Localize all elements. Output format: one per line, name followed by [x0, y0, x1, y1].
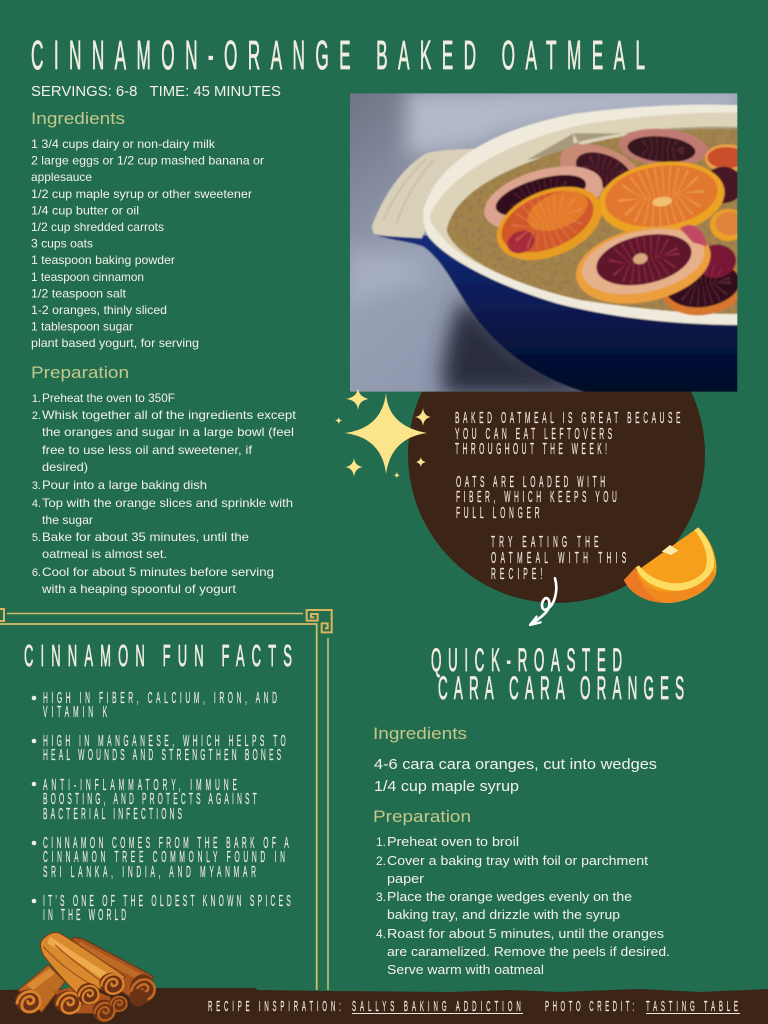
slice: orange small: [496, 185, 602, 261]
oranges preparation steps: 2.: [376, 854, 386, 868]
title: CINNAMON-ORANGE BAKED OATMEAL: [31, 32, 645, 78]
circle text: oatmeal benefits: [455, 409, 681, 583]
oranges preparation steps: Roast for about 5 minutes, until the oranges: [387, 926, 665, 941]
preparation steps: desired): [42, 460, 88, 474]
footer credits: PHOTO CREDIT:: [545, 999, 634, 1015]
circle text: oatmeal benefits: OATS ARE LOADED WITH: [456, 473, 605, 491]
footer credits: RECIPE INSPIRATION:: [208, 999, 341, 1015]
preparation steps: 3.: [32, 480, 41, 492]
brown circle: [408, 306, 705, 603]
circle text: oatmeal benefits: THROUGHOUT THE WEEK!: [455, 440, 607, 458]
icon: orange wedge: [624, 527, 716, 603]
frame: gold key border: [0, 609, 332, 990]
preparation steps: Preheat the oven to 350F: [42, 391, 175, 405]
ingredients list: 1/4 cup butter or oil: [31, 204, 139, 218]
footer credits: [208, 999, 738, 1015]
heading: quick-roasted cara cara oranges: QUICK-ROASTED: [431, 644, 622, 679]
circle text: oatmeal benefits: FULL LONGER: [456, 504, 540, 522]
list: cinnamon facts: HIGH IN FIBER, CALCIUM, IRON, AND: [43, 689, 277, 707]
list: cinnamon facts: IN THE WORLD: [43, 906, 126, 924]
list: cinnamon facts: HEAL WOUNDS AND STRENGTHEN BONES: [43, 746, 281, 764]
preparation steps: 1.: [32, 393, 41, 405]
oranges ingredients list: 1/4 cup maple syrup: [374, 778, 519, 795]
preparation heading: Preparation: [31, 363, 129, 382]
circle text: oatmeal benefits: OATMEAL WITH THIS: [491, 549, 626, 567]
stick: back right: [72, 938, 155, 1004]
oranges preparation steps: 1.: [376, 835, 386, 849]
preparation steps: Cool for about 5 minutes before serving: [42, 565, 274, 579]
preparation steps: with a heaping spoonful of yogurt: [41, 582, 237, 596]
oranges preparation steps: are caramelized. Remove the peels if desired.: [387, 944, 670, 959]
slice: blood orange upper: [559, 144, 637, 197]
preparation steps: 6.: [32, 567, 41, 579]
ingredients list: 1 tablespoon sugar: [31, 320, 133, 334]
servings and time: SERVINGS: 6-8 TIME: 45 MINUTES: [31, 84, 281, 100]
list: cinnamon facts: CINNAMON TREE COMMONLY FOUND IN: [43, 848, 285, 866]
ingredients list: 1/2 teaspoon salt: [31, 286, 127, 300]
oranges ingredients heading: Ingredients: [373, 724, 467, 743]
circle text: oatmeal benefits: FIBER, WHICH KEEPS YOU: [456, 488, 617, 506]
slice: blood orange left: [483, 166, 604, 228]
list: cinnamon facts: ANTI-INFLAMMATORY, IMMUNE: [43, 776, 237, 794]
oranges preparation heading: Preparation: [373, 807, 471, 826]
stick: top: [40, 933, 125, 1005]
preparation steps: 4.: [32, 498, 41, 510]
ingredients list: 1/2 cup shredded carrots: [31, 220, 164, 234]
preparation steps: Bake for about 35 minutes, until the: [42, 530, 249, 544]
slice: blood orange top right: [618, 128, 708, 164]
preparation steps: Whisk together all of the ingredients except: [42, 408, 297, 422]
slice: orange large: [598, 160, 726, 232]
preparation steps: free to use less oil and sweetener, if: [42, 443, 253, 457]
circle text: oatmeal benefits: BAKED OATMEAL IS GREAT BECAUSE: [455, 409, 681, 427]
preparation steps: [32, 391, 297, 596]
list: cinnamon facts: [32, 689, 291, 924]
circle text: oatmeal benefits: RECIPE!: [491, 565, 542, 583]
oranges ingredients list: 4-6 cara cara oranges, cut into wedges: [374, 756, 657, 773]
preparation steps: Top with the orange slices and sprinkle with: [42, 496, 293, 510]
preparation steps: 5.: [32, 532, 41, 544]
slice: right edge oranges: [704, 144, 738, 242]
stick: left: [15, 965, 65, 1013]
preparation steps: the oranges and sugar in a large bowl (feel: [42, 425, 294, 439]
list: cinnamon facts: SRI LANKA, INDIA, AND MYANMAR: [43, 863, 256, 881]
ingredients list: applesauce: [31, 170, 92, 184]
footer credits: TASTING TABLE: [646, 999, 738, 1015]
circle text: oatmeal benefits: YOU CAN EAT LEFTOVERS: [455, 425, 612, 443]
preparation steps: oatmeal is almost set.: [42, 547, 167, 561]
ingredients list: 1/2 cup maple syrup or other sweetener: [31, 187, 252, 201]
list: cinnamon facts: BOOSTING, AND PROTECTS AGAINST: [43, 790, 257, 808]
oranges preparation steps: Preheat oven to broil: [387, 834, 519, 849]
icon: cinnamon sticks: [15, 933, 155, 1022]
list: cinnamon facts: CINNAMON COMES FROM THE BARK OF A: [43, 834, 289, 852]
heading: cinnamon fun facts: CINNAMON FUN FACTS: [24, 639, 292, 674]
ingredients list: 1 teaspoon cinnamon: [31, 270, 144, 284]
ingredients list: 1 3/4 cups dairy or non-dairy milk: [31, 137, 216, 151]
list: cinnamon facts: IT'S ONE OF THE OLDEST KNOWN SPICES: [43, 892, 291, 910]
ingredients heading: Ingredients: [31, 109, 125, 128]
list: cinnamon facts: HIGH IN MANGANESE, WHICH HELPS TO: [43, 732, 286, 750]
list: cinnamon facts: VITAMIN K: [43, 703, 108, 721]
preparation steps: the sugar: [42, 513, 93, 527]
circle text: oatmeal benefits: TRY EATING THE: [491, 533, 599, 551]
ingredients list: 2 large eggs or 1/2 cup mashed banana or: [31, 154, 264, 168]
arrow: swirl pointing to recipe: [530, 578, 556, 625]
preparation steps: Pour into a large baking dish: [42, 478, 207, 492]
ingredients list: 1 teaspoon baking powder: [31, 253, 175, 267]
oranges preparation steps: 3.: [376, 890, 386, 904]
stick: bottom center: [53, 985, 148, 1022]
ingredients list: plant based yogurt, for serving: [31, 336, 199, 350]
oranges preparation steps: Cover a baking tray with foil or parchment: [387, 853, 648, 868]
footer band: [0, 988, 768, 1024]
photo: baked oatmeal in blue dish: [347, 90, 748, 395]
preparation steps: 2.: [32, 410, 41, 422]
oranges preparation steps: 4.: [376, 927, 386, 941]
sparkles: [335, 388, 431, 478]
list: cinnamon facts: BACTERIAL INFECTIONS: [43, 805, 182, 823]
slice: blood orange front: [575, 224, 712, 304]
ingredients list: 1-2 oranges, thinly sliced: [31, 303, 167, 317]
oranges ingredients list: [374, 756, 657, 795]
footer credits: SALLYS BAKING ADDICTION: [352, 999, 521, 1015]
oranges preparation steps: [376, 834, 670, 977]
heading: quick-roasted cara cara oranges: [431, 644, 684, 707]
oranges preparation steps: paper: [387, 871, 425, 886]
ingredients list: [31, 137, 264, 350]
footer link underlines: [352, 1013, 740, 1014]
heading: quick-roasted cara cara oranges: CARA CARA ORANGES: [438, 672, 684, 707]
oranges preparation steps: Place the orange wedges evenly on the: [387, 889, 632, 904]
oranges preparation steps: Serve warm with oatmeal: [387, 962, 544, 977]
oranges preparation steps: baking tray, and drizzle with the syrup: [387, 907, 620, 922]
ingredients list: 3 cups oats: [31, 236, 93, 250]
slice: blood orange lower right: [662, 244, 738, 316]
